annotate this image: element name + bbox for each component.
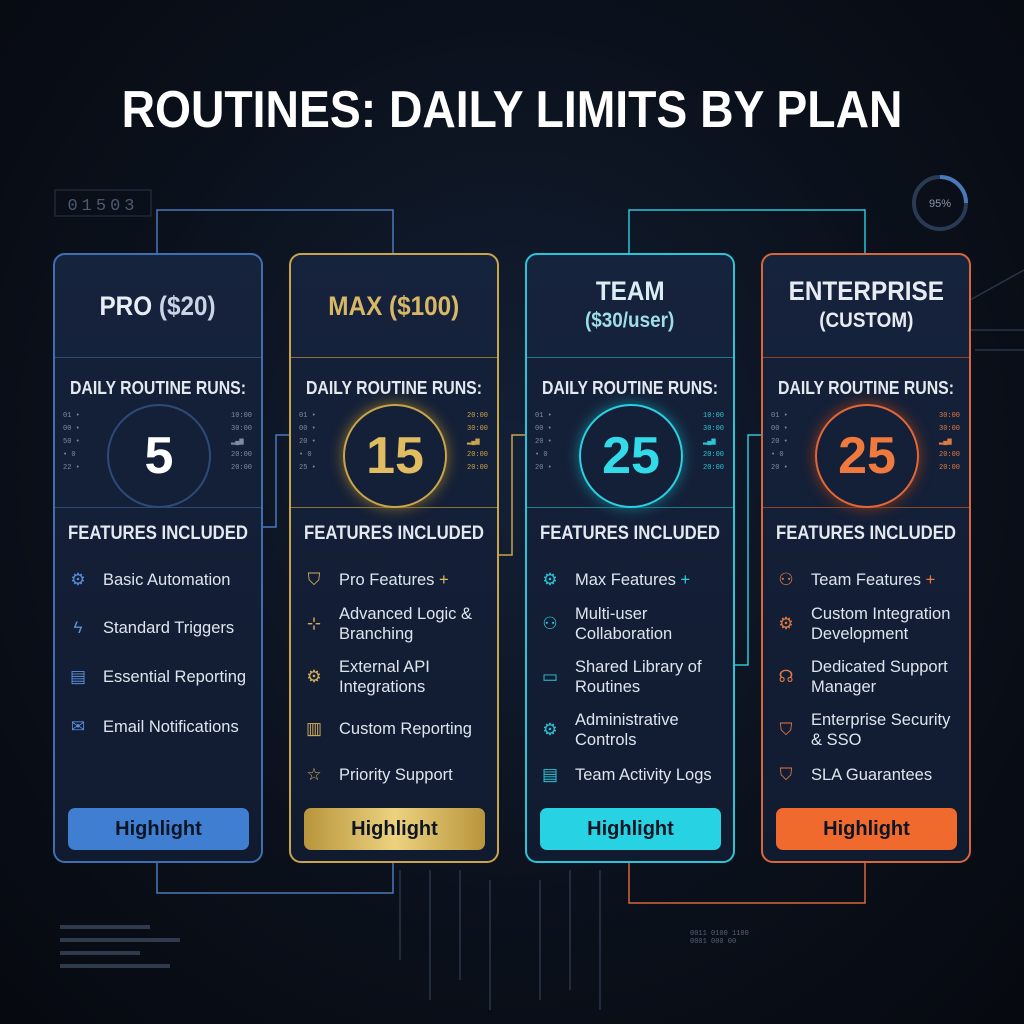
panel: team: ▤ xyxy=(542,765,558,784)
runs: enterprise: 20:00 xyxy=(939,464,960,472)
runs: max: DAILY ROUTINE RUNS: xyxy=(306,378,482,398)
runs: pro: 20:00 xyxy=(231,451,252,459)
panel: team: Administrative Controls xyxy=(575,711,679,749)
panel: pro: ϟ xyxy=(74,618,82,637)
panel: max: ⛉ xyxy=(308,570,320,589)
runs: max: • 0 xyxy=(299,451,312,459)
button: max: Highlight xyxy=(351,818,438,840)
panel: pro: Email Notifications xyxy=(103,718,239,736)
button: max xyxy=(304,808,485,850)
runs: max: 20:00 xyxy=(467,451,488,459)
button: pro xyxy=(68,808,249,850)
runs: team: 25 xyxy=(602,427,660,485)
runs: pro: 10:00 xyxy=(231,412,252,420)
panel: pro: Basic Automation xyxy=(103,571,230,589)
panel: enterprise: SLA Guarantees xyxy=(811,766,932,784)
panel: team: Shared Library of Routines xyxy=(575,658,702,696)
panel: team: ⚇ xyxy=(542,614,558,633)
button: team xyxy=(540,808,721,850)
runs: team: 20:00 xyxy=(703,451,724,459)
panel: enterprise: + xyxy=(926,571,935,589)
runs: team: 20 • xyxy=(535,464,552,472)
background circuit lines: 0011 0100 1100 xyxy=(690,930,749,938)
runs: pro xyxy=(55,357,261,508)
runs: enterprise xyxy=(763,357,969,508)
heading: enterprise: (CUSTOM) xyxy=(819,309,913,332)
panel: team: ▭ xyxy=(542,667,558,686)
panel: max: External API Integrations xyxy=(339,658,430,696)
panel: max: + xyxy=(439,571,449,589)
panel: enterprise: ⛉ xyxy=(780,720,792,739)
panel: max: ⊹ xyxy=(307,614,321,633)
runs: max: ▂▄▆ xyxy=(467,438,480,446)
runs: pro: 22 • xyxy=(63,464,80,472)
runs: enterprise: 01 • xyxy=(771,412,788,420)
runs: pro: 30:00 xyxy=(231,425,252,433)
button: enterprise: Highlight xyxy=(823,818,910,840)
features: team: FEATURES INCLUDED xyxy=(540,523,720,544)
panel: team: Team Activity Logs xyxy=(575,766,712,784)
heading: max: MAX ($100) xyxy=(328,291,459,321)
runs: enterprise: 30:00 xyxy=(939,425,960,433)
panel: pro xyxy=(53,253,263,863)
runs: enterprise: DAILY ROUTINE RUNS: xyxy=(778,378,954,398)
heading: team: TEAM xyxy=(596,276,664,306)
runs: max: 25 • xyxy=(299,464,316,472)
runs: enterprise: • 0 xyxy=(771,451,784,459)
panel: enterprise: ⛉ xyxy=(780,765,792,784)
features: max: FEATURES INCLUDED xyxy=(304,523,484,544)
runs: pro: 5 xyxy=(145,427,173,485)
runs: pro: 50 • xyxy=(63,438,80,446)
panel: max: Custom Reporting xyxy=(339,720,472,738)
runs: team: 10:00 xyxy=(703,412,724,420)
panel: enterprise: Team Features xyxy=(811,571,921,589)
panel: max: Advanced Logic & Branching xyxy=(339,605,472,643)
panel: enterprise: Enterprise Security & SSO xyxy=(811,711,950,749)
button: pro: Highlight xyxy=(115,818,202,840)
runs: max: 00 • xyxy=(299,425,316,433)
runs: team: 00 • xyxy=(535,425,552,433)
heading: team xyxy=(585,276,675,332)
panel: team: + xyxy=(680,571,690,589)
runs: pro: ▂▄▆ xyxy=(231,438,244,446)
runs: max xyxy=(291,357,497,508)
panel: pro: ⚙ xyxy=(70,570,86,589)
panel: enterprise: ⚇ xyxy=(778,570,794,589)
runs: enterprise: 20:00 xyxy=(939,451,960,459)
background circuit lines: 0001 000 00 xyxy=(690,938,736,946)
panel: max: ☆ xyxy=(306,765,322,784)
runs: pro: 20:00 xyxy=(231,464,252,472)
runs: team xyxy=(527,357,733,508)
runs: team: ▂▄▆ xyxy=(703,438,716,446)
panel: team: ⚙ xyxy=(542,570,558,589)
runs: max: 20:00 xyxy=(467,464,488,472)
runs: team: • 0 xyxy=(535,451,548,459)
heading: enterprise: ENTERPRISE xyxy=(788,276,944,306)
panel: team: Max Features xyxy=(575,571,676,589)
runs: pro: • 0 xyxy=(63,451,76,459)
panel: max: ⚙ xyxy=(306,667,322,686)
button: team: Highlight xyxy=(587,818,674,840)
panel: pro: Standard Triggers xyxy=(103,619,234,637)
title: ROUTINES: DAILY LIMITS BY PLAN xyxy=(122,81,902,139)
runs: team: 30:00 xyxy=(703,425,724,433)
heading: pro: PRO ($20) xyxy=(100,291,216,321)
panel: team: Multi-user Collaboration xyxy=(575,605,672,643)
panel: max: ▥ xyxy=(306,719,322,738)
heading: enterprise xyxy=(788,276,944,332)
runs: pro: 01 • xyxy=(63,412,80,420)
runs: max: 20 • xyxy=(299,438,316,446)
features: enterprise: FEATURES INCLUDED xyxy=(776,523,956,544)
panel: enterprise: ☊ xyxy=(778,667,794,686)
panel: enterprise: ⚙ xyxy=(778,614,794,633)
runs: team: 01 • xyxy=(535,412,552,420)
runs: team: 20:00 xyxy=(703,464,724,472)
runs: pro: DAILY ROUTINE RUNS: xyxy=(70,378,246,398)
panel: enterprise: Custom Integration Development xyxy=(811,605,950,643)
runs: max: 20:00 xyxy=(467,412,488,420)
runs: enterprise: 25 xyxy=(838,427,896,485)
background circuit lines: 01503 xyxy=(67,197,139,216)
panel: pro: ▤ xyxy=(70,667,86,686)
runs: max: 01 • xyxy=(299,412,316,420)
heading: team: ($30/user) xyxy=(585,309,675,332)
panel: enterprise: Dedicated Support Manager xyxy=(811,658,948,696)
panel: team xyxy=(525,253,735,863)
runs: enterprise: 20 • xyxy=(771,438,788,446)
background circuit lines: 95% xyxy=(929,198,951,210)
features: pro: FEATURES INCLUDED xyxy=(68,523,248,544)
button: enterprise xyxy=(776,808,957,850)
runs: team: DAILY ROUTINE RUNS: xyxy=(542,378,718,398)
panel: max: Priority Support xyxy=(339,766,453,784)
panel: enterprise xyxy=(761,253,971,863)
runs: team: 20 • xyxy=(535,438,552,446)
runs: enterprise: 20 • xyxy=(771,464,788,472)
panel: team: ⚙ xyxy=(542,720,558,739)
panel: max: Pro Features xyxy=(339,571,434,589)
runs: max: 30:00 xyxy=(467,425,488,433)
runs: max: 15 xyxy=(366,427,424,485)
panel: pro: Essential Reporting xyxy=(103,668,246,686)
panel: pro: ✉ xyxy=(71,717,85,736)
panel: max xyxy=(289,253,499,863)
runs: enterprise: ▂▄▆ xyxy=(939,438,952,446)
runs: pro: 00 • xyxy=(63,425,80,433)
runs: enterprise: 30:00 xyxy=(939,412,960,420)
runs: enterprise: 00 • xyxy=(771,425,788,433)
